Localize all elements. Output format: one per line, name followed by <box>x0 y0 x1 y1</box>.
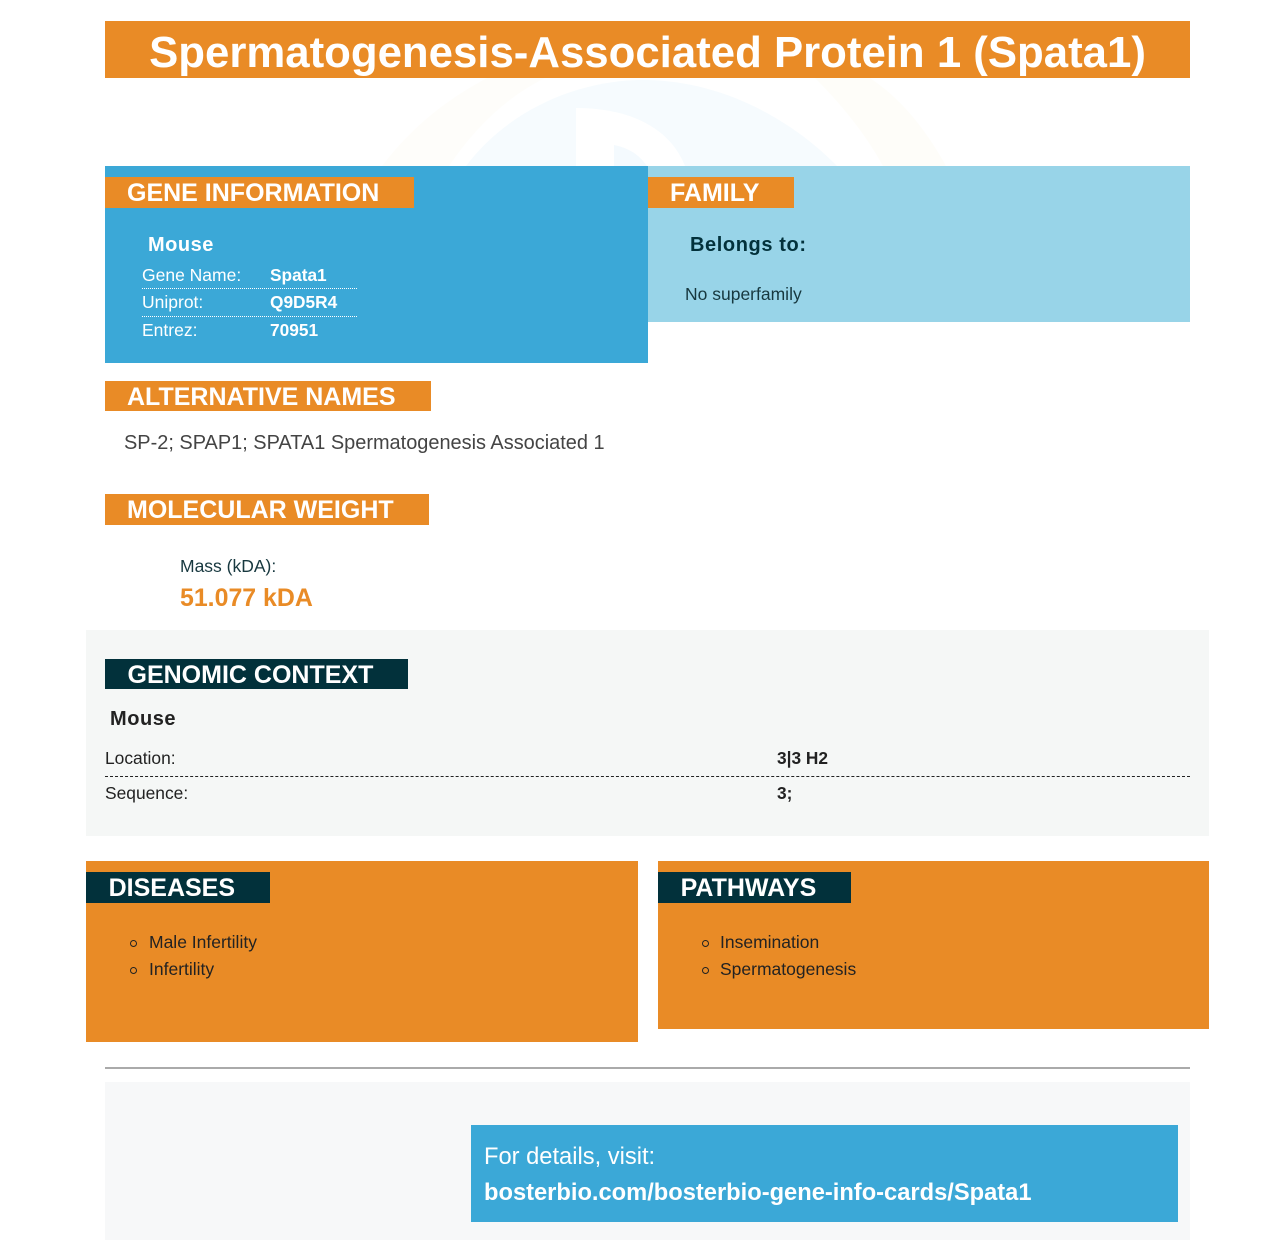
heading: family: FAMILY <box>670 179 759 207</box>
heading: diseases <box>86 872 270 903</box>
location row <box>105 746 1190 777</box>
watermark logo <box>466 80 836 166</box>
species label: Mouse <box>148 234 214 256</box>
entrez row: 70951 <box>270 320 318 340</box>
location row: Location: <box>105 748 176 768</box>
heading: pathways <box>658 872 851 903</box>
heading: family <box>648 177 794 208</box>
panel: family <box>648 166 1190 322</box>
superfamily text: No superfamily <box>685 284 802 304</box>
gene name row: Gene Name: <box>142 265 241 285</box>
callout: details link <box>471 1125 1178 1222</box>
disease list: Male Infertility <box>149 932 257 952</box>
sequence row: Sequence: <box>105 783 188 803</box>
heading: alternative names: ALTERNATIVE NAMES <box>127 383 396 411</box>
callout label: For details, visit: <box>484 1144 655 1170</box>
panel: pathways <box>658 861 1209 1029</box>
species label: Mouse <box>110 708 176 730</box>
heading: genomic context: GENOMIC CONTEXT <box>128 661 373 689</box>
panel: gene information <box>105 166 648 363</box>
uniprot row: Q9D5R4 <box>270 292 337 312</box>
entrez row <box>142 320 318 340</box>
gene name row: Spata1 <box>270 265 327 285</box>
disease list: Infertility <box>149 959 214 979</box>
sequence row: 3; <box>777 783 792 803</box>
heading: gene information: GENE INFORMATION <box>127 179 379 207</box>
heading: diseases: DISEASES <box>109 874 235 902</box>
pathway list: Insemination <box>720 932 819 952</box>
sequence row <box>105 783 792 803</box>
mass label: Mass (kDA): <box>180 556 276 576</box>
belongs to label: Belongs to: <box>690 234 807 256</box>
panel: genomic context <box>86 630 1209 836</box>
entrez row: Entrez: <box>142 320 197 340</box>
title banner: Spermatogenesis-Associated Protein 1 (Spata1) <box>149 28 1146 77</box>
heading: pathways: PATHWAYS <box>681 874 816 902</box>
panel: footer <box>105 1082 1190 1240</box>
callout url: bosterbio.com/bosterbio-gene-info-cards/Spata1 <box>484 1180 1032 1206</box>
location row: 3|3 H2 <box>777 748 828 768</box>
mass value: 51.077 kDA <box>180 584 313 612</box>
uniprot row <box>142 291 357 317</box>
gene name row <box>142 264 357 289</box>
pathway list <box>702 932 856 979</box>
alternative names text: SP-2; SPAP1; SPATA1 Spermatogenesis Associated 1 <box>124 432 605 454</box>
uniprot row: Uniprot: <box>142 292 203 312</box>
panel: diseases <box>86 861 638 1042</box>
heading: molecular weight: MOLECULAR WEIGHT <box>127 496 394 524</box>
pathway list: Spermatogenesis <box>720 959 856 979</box>
disease list <box>130 932 257 979</box>
